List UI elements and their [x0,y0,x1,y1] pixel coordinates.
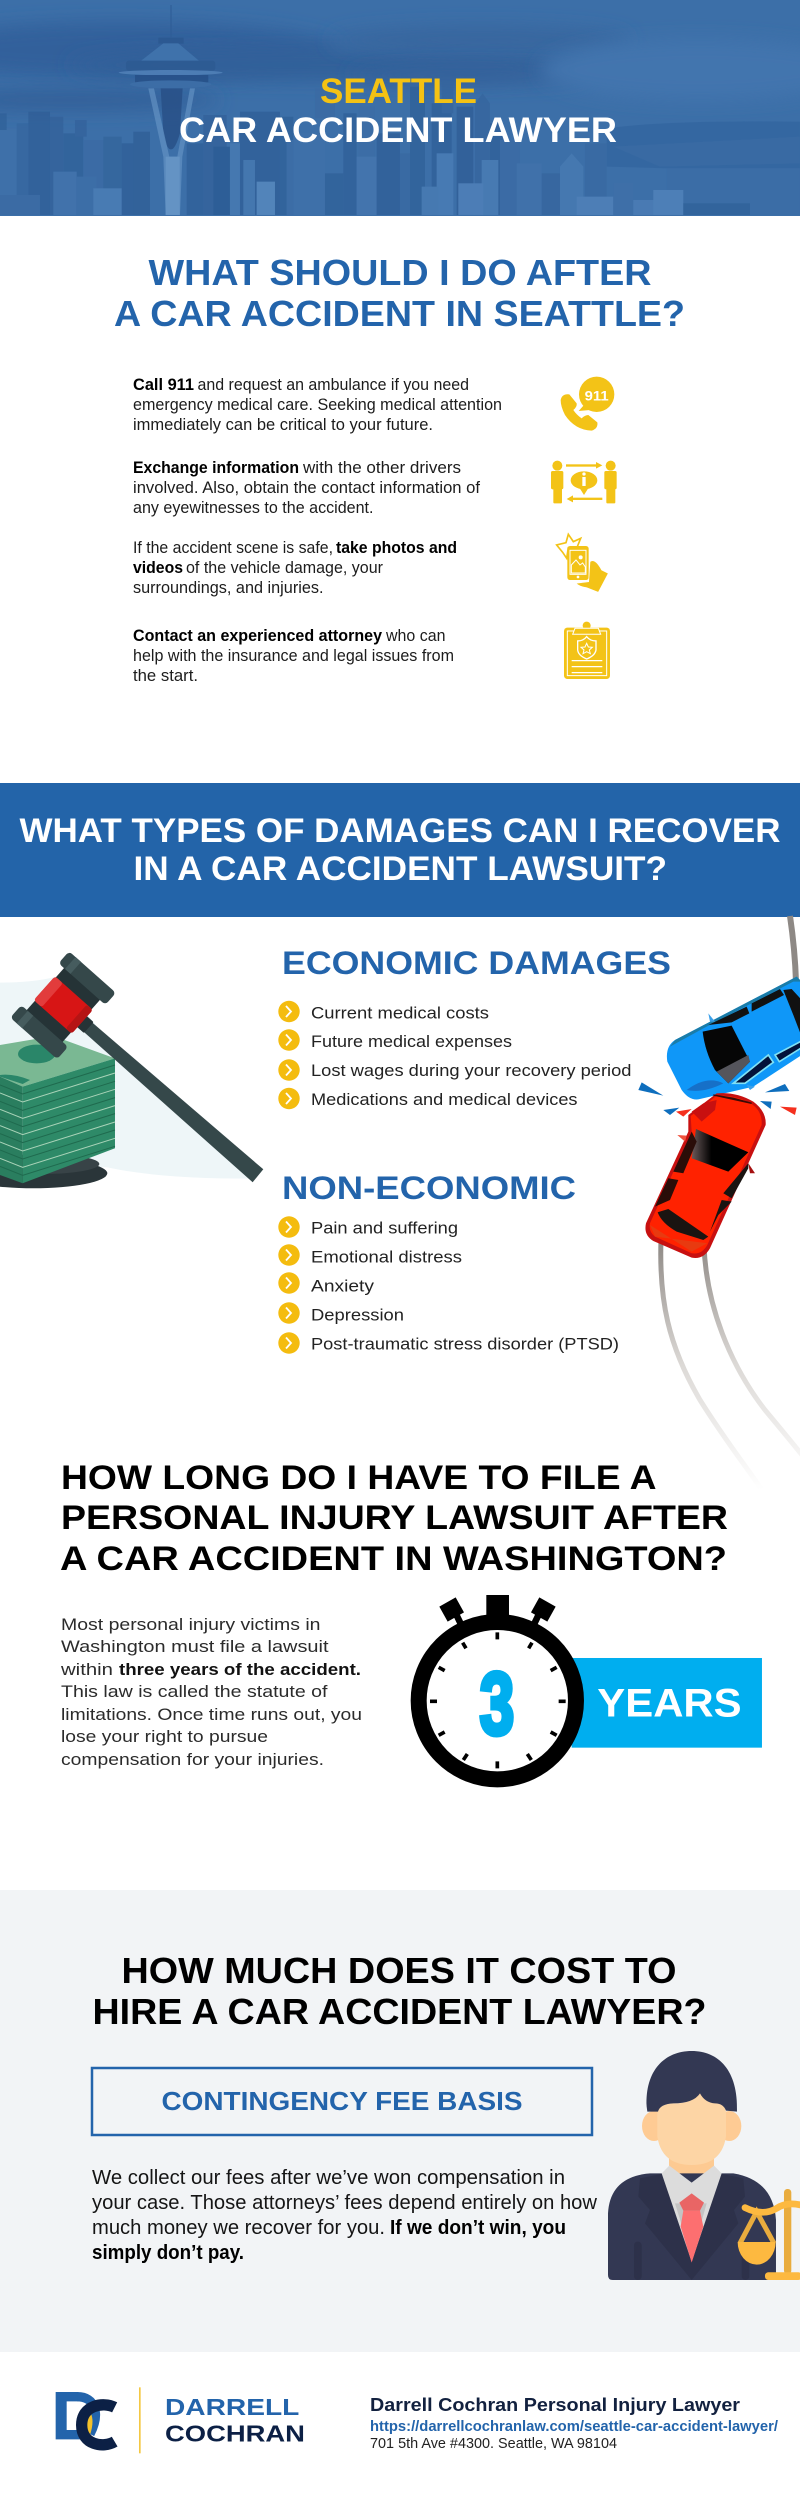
list: non-economic: Post-traumatic stress disorder (PTSD) [311,1335,619,1354]
text block: take photos: of the vehicle damage, your [186,559,383,577]
text block: statute of limitations: within [60,1661,113,1679]
text block: take photos: If the accident scene is safe, [133,539,333,557]
list: non-economic [278,1216,619,1354]
list: economic damages [278,1001,632,1109]
footer contact [370,2395,779,2452]
icon: space needle [119,5,223,215]
text block: call 911 [133,376,502,434]
text block: contact attorney: the start. [133,667,198,685]
text block: fees: your case. Those attorneys’ fees depend entirely on how [92,2192,598,2214]
text block: contact attorney [133,627,454,685]
text block: fees: We collect our fees after we’ve won compensation in [92,2167,565,2189]
heading: how long: HOW LONG DO I HAVE TO FILE A [61,1459,656,1497]
list: economic damages: Current medical costs [311,1004,489,1022]
text block: exchange information [133,459,480,517]
text block: exchange information: Exchange information [133,459,299,477]
box: contingency fee basis [92,2068,592,2135]
title [180,78,616,142]
heading: how long: PERSONAL INJURY LAWSUIT AFTER [61,1499,728,1537]
text block: fees: simply don’t pay. [92,2242,244,2264]
list: non-economic: Anxiety [311,1277,375,1296]
heading: what should I do: WHAT SHOULD I DO AFTER [148,252,652,293]
text block: take photos: take photos and [336,539,457,557]
text block: fees: much money we recover for you. [92,2217,385,2239]
panel: cost [0,1890,800,2352]
footer contact: Darrell Cochran Personal Injury Lawyer [370,2395,740,2415]
text block: contact attorney: Contact an experienced attorney [133,627,383,645]
logo: Darrell Cochran: COCHRAN [165,2421,305,2447]
illustration: skid marks [661,916,800,1490]
band: damages heading: IN A CAR ACCIDENT LAWSUIT? [134,850,667,888]
text block: take photos [133,539,457,597]
text block: exchange information: involved. Also, obtain the contact information of [133,479,480,497]
icon: clipboard badge [564,622,610,679]
heading: how long: A CAR ACCIDENT IN WASHINGTON? [60,1540,727,1578]
icon: phone 911: 911 [585,387,609,403]
list: non-economic: Depression [311,1306,404,1325]
stopwatch: 3 years: YEARS [597,1682,742,1726]
text block: exchange information: with the other drivers [302,459,461,477]
text block: statute of limitations: three years of the accident. [119,1661,361,1679]
list: economic damages: Future medical expenses [311,1032,512,1051]
text block: call 911: emergency medical care. Seeking medical attention [133,396,502,414]
list: economic damages: Lost wages during your recovery period [311,1061,632,1080]
text block: call 911: and request an ambulance if you need [198,376,469,394]
text block: statute of limitations: This law is called the statute of [61,1683,328,1701]
illustration: blue car [638,977,800,1117]
heading: how much: HOW MUCH DOES IT COST TO [122,1950,676,1991]
list: economic damages: Medications and medical devices [311,1090,578,1109]
text block: statute of limitations: Most personal injury victims in [61,1616,320,1634]
text block: take photos: surroundings, and injuries. [133,579,324,597]
text block: statute of limitations [60,1616,362,1769]
title: SEATTLE [320,72,477,111]
band: damages heading: WHAT TYPES OF DAMAGES CAN I RECOVER [20,812,780,850]
logo: Darrell Cochran [56,2387,305,2453]
header banner: skyline [0,0,800,216]
heading: economic damages: ECONOMIC DAMAGES [282,945,671,981]
icon: exchange info [551,461,617,503]
text block: statute of limitations: limitations. Once time runs out, you [61,1706,362,1724]
illustration: red car [645,1093,766,1258]
heading: how long [60,1459,728,1578]
icon: phone 911 [561,377,614,431]
text block: fees: If we don’t win, you [390,2217,566,2239]
text block: exchange information: any eyewitnesses to the accident. [133,499,374,517]
icon: phone photo [557,534,608,592]
stopwatch: 3 years [419,1595,762,1779]
title: CAR ACCIDENT LAWYER [179,111,617,150]
text block: contact attorney: who can [385,627,446,645]
text block: call 911: immediately can be critical to your future. [133,416,433,434]
heading: non-economic: NON-ECONOMIC [282,1170,576,1206]
text block: fees [92,2167,598,2264]
list: non-economic: Emotional distress [311,1248,462,1267]
band: damages heading [0,783,800,917]
text block: contact attorney: help with the insurance and legal issues from [133,647,454,665]
box: contingency fee basis: CONTINGENCY FEE BASIS [162,2086,522,2116]
footer contact: 701 5th Ave #4300. Seattle, WA 98104 [370,2435,617,2452]
logo: Darrell Cochran: DARRELL [165,2394,299,2420]
footer contact: https://darrellcochranlaw.com/seattle-car-accident-lawyer/ [370,2418,779,2435]
illustration: lawyer [608,2051,800,2280]
illustration: gavel and money [0,951,263,1188]
text block: statute of limitations: lose your right to pursue [61,1728,268,1746]
heading: what should I do [114,252,685,334]
text block: call 911: Call 911 [133,376,194,394]
list: non-economic: Pain and suffering [311,1219,458,1238]
heading: what should I do: A CAR ACCIDENT IN SEATTLE? [114,293,685,334]
stopwatch: 3 years: 3 [480,1654,514,1753]
heading: how much [92,1950,706,2032]
text block: take photos: videos [133,559,183,577]
text block: statute of limitations: compensation for your injuries. [61,1751,324,1769]
text block: statute of limitations: Washington must file a lawsuit [61,1638,329,1656]
heading: how much: HIRE A CAR ACCIDENT LAWYER? [92,1991,706,2032]
